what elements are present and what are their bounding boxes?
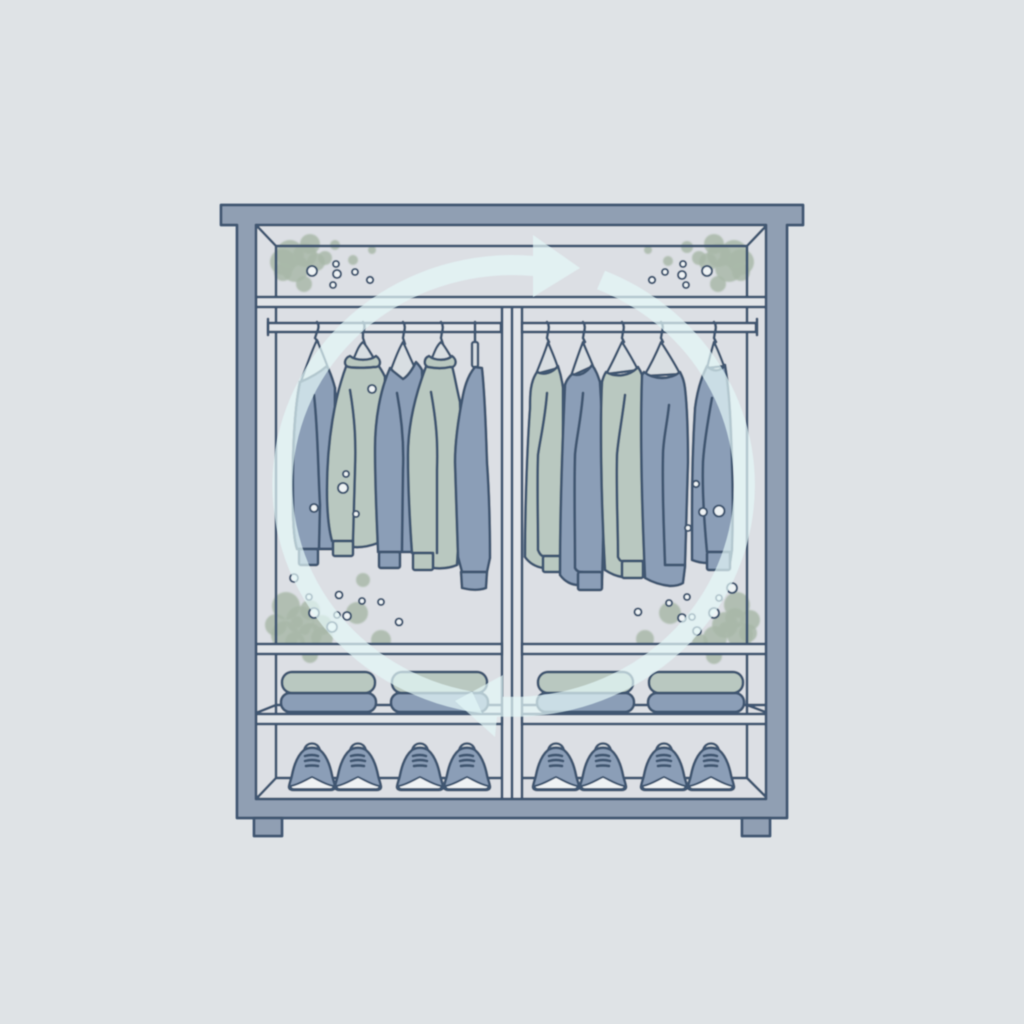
- left garments: [293, 322, 490, 590]
- shoe pair 2: [397, 744, 490, 790]
- shoe pair 4: [641, 744, 734, 790]
- green shirt 1: [525, 342, 563, 572]
- moisture droplets: [290, 261, 737, 635]
- mold patch: top left: [270, 234, 376, 292]
- interior back panel outline: [256, 225, 768, 799]
- left hanging rod: [268, 323, 501, 332]
- middle shelf: [256, 644, 768, 654]
- airflow arrow: right arc pointing left: [455, 271, 755, 737]
- folded clothes: [281, 672, 744, 712]
- wardrobe interior: [256, 225, 766, 799]
- coat 2: [327, 342, 385, 556]
- hanger hooks right: [547, 322, 716, 342]
- airflow arrow: left arc pointing right: [272, 235, 580, 713]
- coat 4: [408, 342, 461, 570]
- right garments: [525, 322, 733, 590]
- shoe pair 1: [289, 744, 381, 790]
- circular airflow arrows: [272, 235, 755, 737]
- wardrobe: [221, 205, 803, 836]
- left foot: [254, 818, 282, 836]
- stack 3: [537, 672, 634, 712]
- mold patch: bottom left: [265, 573, 391, 663]
- lower shelf: [256, 714, 768, 724]
- jacket 1: [293, 340, 335, 565]
- stack 4: [648, 672, 744, 712]
- blue sweater 4: [641, 342, 688, 586]
- blue shirt 2: [560, 342, 604, 590]
- wardrobe frame: [221, 205, 803, 818]
- stack 2: [391, 672, 488, 712]
- stack 1: [281, 672, 376, 712]
- top shelf: [256, 297, 768, 307]
- sweater 3: [375, 342, 422, 568]
- shoe pair 3: [533, 744, 626, 790]
- hanger hooks left: [315, 322, 475, 344]
- center divider: [502, 307, 522, 799]
- right hanging rod: [522, 323, 756, 332]
- right foot: [742, 818, 770, 836]
- sweater 5: [455, 342, 490, 590]
- shoes: [289, 744, 734, 790]
- green shirt 3: [601, 342, 647, 578]
- rod end caps: [268, 319, 757, 335]
- mold patch: top right: [644, 234, 754, 292]
- mold patch: bottom right: [636, 592, 760, 664]
- blue jacket 5: [692, 342, 733, 570]
